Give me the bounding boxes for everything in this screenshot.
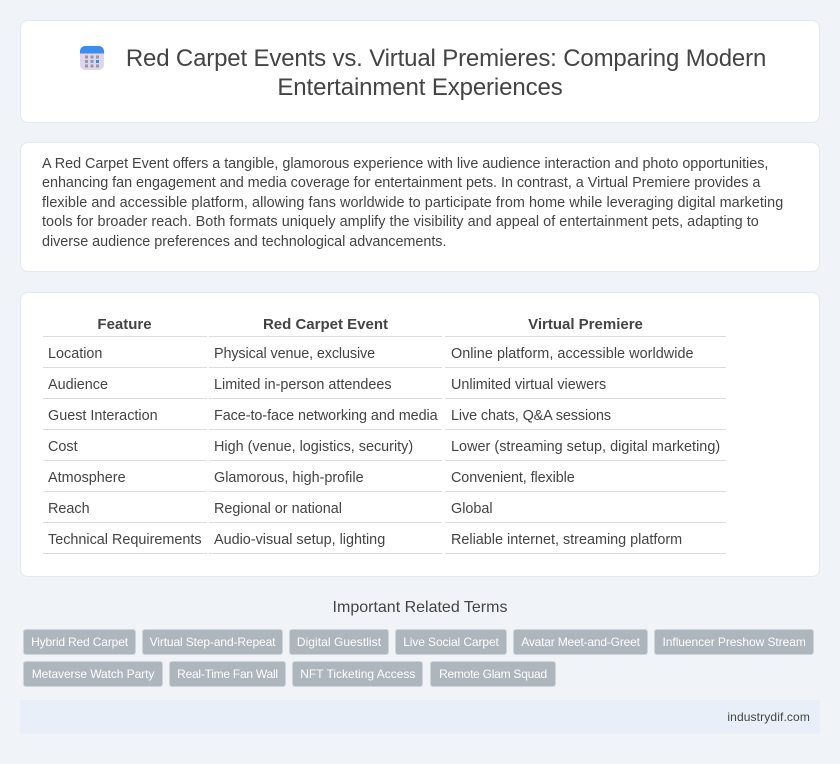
related term tags: Virtual Step-and-Repeat	[150, 635, 275, 649]
comparison table: Convenient, flexible	[451, 470, 575, 486]
related term tags: Hybrid Red Carpet	[31, 635, 128, 649]
comparison table: Cost	[48, 439, 78, 455]
comparison table: High (venue, logistics, security)	[214, 439, 413, 455]
related term tags: Digital Guestlist	[297, 635, 381, 649]
comparison table: Online platform, accessible worldwide	[451, 346, 694, 362]
comparison table: Audience	[48, 377, 108, 393]
comparison table: Technical Requirements	[48, 532, 202, 548]
comparison table	[43, 316, 726, 554]
footer bar	[20, 700, 820, 734]
comparison table: Feature	[97, 316, 152, 333]
comparison table: Limited in-person attendees	[214, 377, 392, 393]
comparison table: Red Carpet Event	[263, 316, 388, 333]
title	[126, 45, 766, 101]
intro paragraph: tools for broader reach. Both formats uniquely amplify the visibility and appeal of entertainment pets, adapting to	[42, 214, 759, 230]
intro paragraph	[42, 156, 783, 250]
comparison table: Physical venue, exclusive	[214, 346, 375, 362]
comparison table: Reach	[48, 501, 90, 517]
heading: important related terms: Important Related Terms	[333, 599, 507, 616]
intro paragraph: flexible and accessible platform, allowing fans worldwide to participate from home while leveraging digital marketing	[42, 195, 783, 211]
icon: calendar	[80, 46, 104, 70]
panel: intro text	[20, 142, 820, 272]
related term tags: Remote Glam Squad	[439, 667, 547, 681]
comparison table: Glamorous, high-profile	[214, 470, 364, 486]
comparison table: Regional or national	[214, 501, 342, 517]
panel: header	[20, 20, 820, 123]
related term tags: NFT Ticketing Access	[300, 667, 415, 681]
comparison table: Reliable internet, streaming platform	[451, 532, 682, 548]
footer source: industrydif.com	[727, 710, 810, 724]
comparison table: Guest Interaction	[48, 408, 158, 424]
comparison table: Face-to-face networking and media	[214, 408, 438, 424]
title: Red Carpet Events vs. Virtual Premieres: Comparing Modern	[126, 45, 766, 72]
panel: comparison table	[20, 292, 820, 577]
intro paragraph: diverse audience preferences and technological advancements.	[42, 234, 446, 250]
comparison table: Atmosphere	[48, 470, 126, 486]
related term tags: Metaverse Watch Party	[32, 667, 154, 681]
related term tags: Avatar Meet-and-Greet	[521, 635, 640, 649]
intro paragraph: A Red Carpet Event offers a tangible, glamorous experience with live audience interaction and photo opportunities,	[42, 156, 768, 172]
comparison table: Lower (streaming setup, digital marketing)	[451, 439, 720, 455]
related term tags: Real-Time Fan Wall	[177, 667, 278, 681]
comparison table: Virtual Premiere	[528, 316, 643, 333]
comparison table: Unlimited virtual viewers	[451, 377, 606, 393]
related term tags: Influencer Preshow Stream	[663, 635, 806, 649]
comparison table: Live chats, Q&A sessions	[451, 408, 611, 424]
related term tags: Live Social Carpet	[403, 635, 499, 649]
comparison table: Audio-visual setup, lighting	[214, 532, 385, 548]
comparison table: Location	[48, 346, 102, 362]
intro paragraph: enhancing fan engagement and media coverage for entertainment pets. In contrast, a Virtual Premiere provides a	[42, 175, 760, 191]
comparison table: Global	[451, 501, 493, 517]
title: Entertainment Experiences	[277, 74, 563, 101]
